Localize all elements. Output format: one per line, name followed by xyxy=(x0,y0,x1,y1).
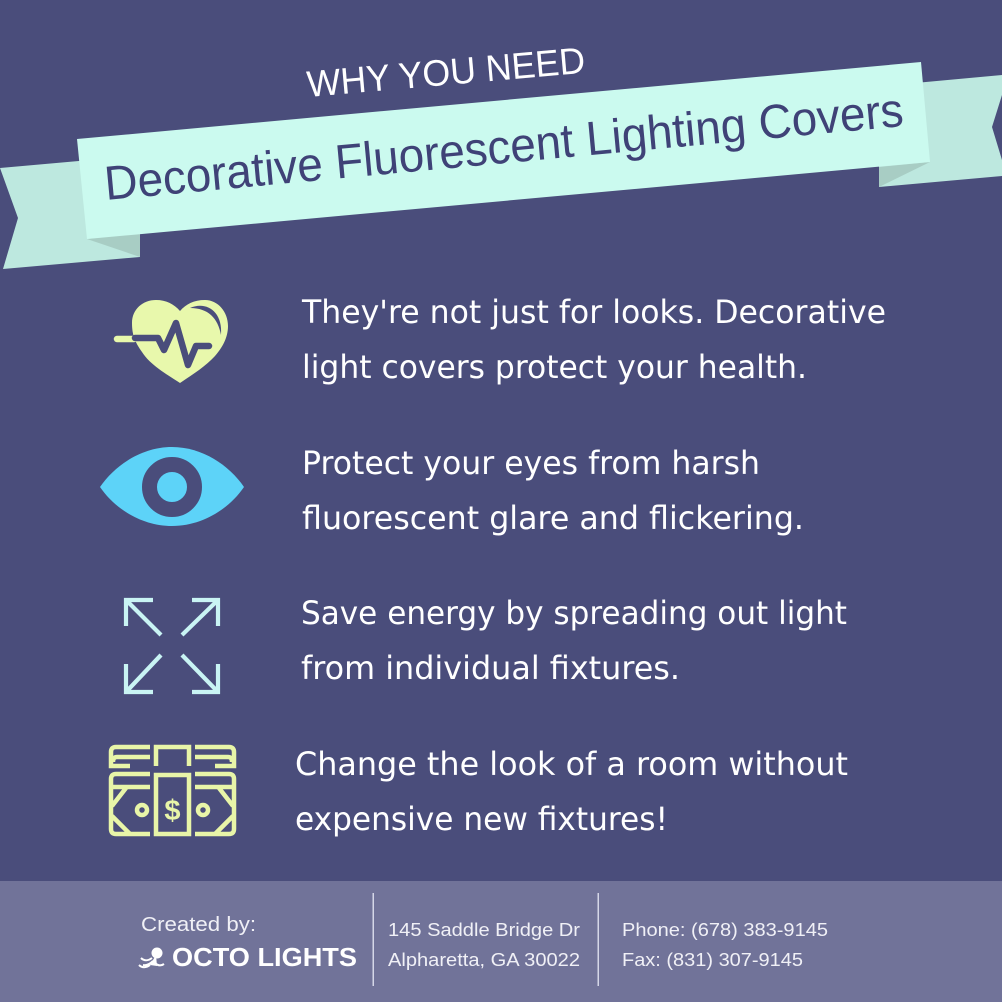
ribbon right fold xyxy=(879,162,930,187)
icon: octopus logo xyxy=(139,948,164,967)
address: Alpharetta, GA 30022 xyxy=(388,950,580,970)
divider xyxy=(598,893,599,986)
text: eyes xyxy=(302,444,804,537)
text: energy xyxy=(301,594,847,687)
ribbon left fold xyxy=(87,233,140,257)
text: health: They're not just for looks. Decorative xyxy=(301,293,886,331)
text: health xyxy=(301,293,886,386)
ribbon title text: Decorative Fluorescent Lighting Covers xyxy=(102,84,906,211)
icon: heart with pulse xyxy=(117,300,228,383)
icon: expanding arrows xyxy=(126,600,218,692)
ribbon main band xyxy=(77,62,930,239)
phone and fax: Fax: (831) 307-9145 xyxy=(622,950,803,970)
icon: money xyxy=(111,747,234,834)
logo wordmark: OCTO LIGHTS xyxy=(172,942,357,972)
text: energy: from individual fixtures. xyxy=(301,649,680,687)
text: room look xyxy=(295,745,848,838)
text: health: light covers protect your health. xyxy=(302,348,807,386)
dollar sign: $ xyxy=(164,795,181,827)
phone and fax: Phone: (678) 383-9145 xyxy=(622,920,828,940)
ribbon right tail xyxy=(879,75,1002,187)
created by: Created by: xyxy=(141,914,256,936)
phone and fax xyxy=(622,920,828,970)
icon: eye xyxy=(100,447,244,526)
text: eyes: Protect your eyes from harsh xyxy=(302,444,760,482)
address xyxy=(388,920,580,970)
text: energy: Save energy by spreading out light xyxy=(301,594,847,632)
text: room look: expensive new fixtures! xyxy=(295,800,668,838)
address: 145 Saddle Bridge Dr xyxy=(388,920,580,940)
footer band xyxy=(0,881,1002,1002)
title ribbon xyxy=(0,62,1002,269)
text: eyes: fluorescent glare and flickering. xyxy=(302,499,804,537)
ribbon left tail xyxy=(0,160,140,269)
divider xyxy=(372,893,374,986)
subtitle: WHY YOU NEED xyxy=(305,40,587,105)
text: room look: Change the look of a room without xyxy=(295,745,848,783)
